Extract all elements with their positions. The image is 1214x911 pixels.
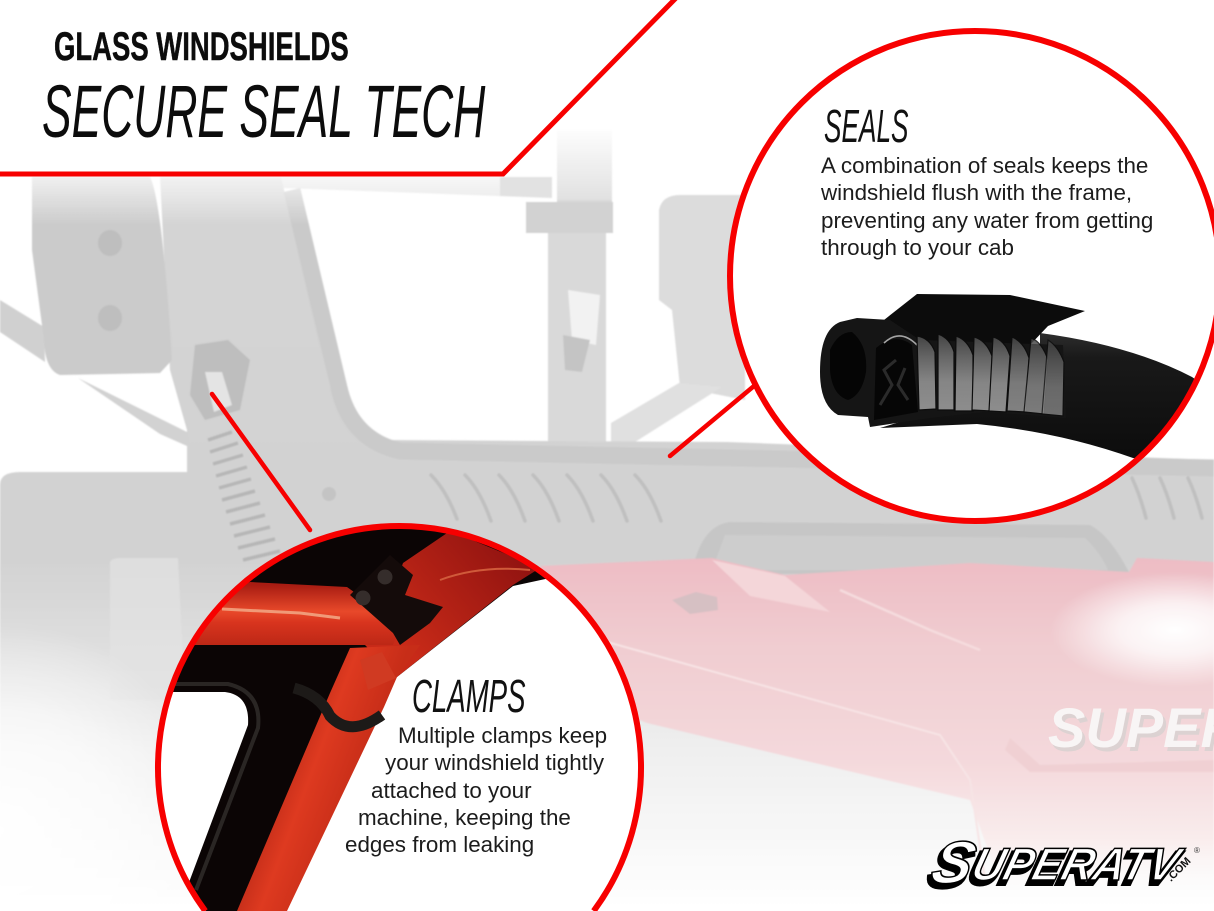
vents bbox=[431, 475, 1202, 521]
vertical red post bbox=[237, 646, 398, 911]
panel: title banner bbox=[0, 0, 676, 174]
logo: SuperATV: S bbox=[922, 833, 980, 900]
speaker holes bbox=[98, 230, 122, 256]
logo suffix: .COM: .COM bbox=[1165, 855, 1193, 884]
text block: seals bbox=[821, 100, 1153, 260]
icon: rubber seal photo bbox=[820, 294, 1194, 458]
heading: clamps: CLAMPS bbox=[412, 670, 526, 722]
body: clamps description: edges from leaking bbox=[345, 832, 534, 857]
door rim bbox=[292, 190, 1214, 468]
window opening bbox=[160, 692, 248, 881]
pointer line to seals bbox=[670, 386, 754, 456]
body: seals description: preventing any water from getting bbox=[821, 208, 1153, 233]
body: seals description bbox=[821, 153, 1153, 260]
body: clamps description: your windshield tightly bbox=[385, 750, 604, 775]
heading: secure seal tech: SECURE SEAL TECH bbox=[42, 70, 485, 153]
top frame bbox=[281, 177, 552, 198]
logo: SuperATV: S bbox=[925, 829, 983, 896]
red hood bbox=[540, 558, 1214, 911]
body: seals description: through to your cab bbox=[821, 235, 1014, 260]
heading: seals: SEALS bbox=[824, 100, 909, 152]
right side panel bbox=[659, 195, 745, 400]
pillar clamp bbox=[190, 340, 250, 420]
cable tie bbox=[294, 688, 382, 727]
black roof and door bbox=[173, 529, 546, 911]
left tub detail bbox=[110, 558, 185, 700]
lower struts bbox=[0, 300, 45, 362]
mirror box bbox=[32, 177, 172, 375]
rear bracket and strut bbox=[526, 130, 613, 442]
body: clamps description: attached to your bbox=[371, 778, 532, 803]
hood recess bbox=[695, 522, 1130, 574]
logo: SuperATV: UPERATV bbox=[967, 839, 1189, 890]
hood stripe bbox=[1005, 738, 1214, 772]
horizontal red tube bbox=[194, 582, 394, 645]
flap bbox=[884, 294, 1085, 345]
upper red tube bbox=[360, 531, 540, 677]
clamp block bbox=[350, 555, 443, 645]
icon: red frame and clamp photo bbox=[173, 529, 546, 911]
logo: SuperATV bbox=[922, 829, 1191, 900]
panel: seals circle bbox=[730, 31, 1214, 521]
metal fins bbox=[917, 334, 1064, 416]
logo mark: registered: ® bbox=[1194, 846, 1200, 855]
spring bbox=[208, 432, 280, 560]
panel: clamps circle bbox=[150, 520, 641, 911]
long seal body bbox=[880, 333, 1194, 458]
heading: glass windshields: GLASS WINDSHIELDS bbox=[54, 25, 349, 69]
logo: SuperATV: UPERATV bbox=[964, 843, 1186, 894]
body: seals description: windshield flush with the frame, bbox=[821, 180, 1132, 205]
body: clamps description: machine, keeping the bbox=[358, 805, 571, 830]
text block: clamps bbox=[345, 670, 607, 857]
pointer line to clamps bbox=[212, 394, 310, 530]
body: clamps description: Multiple clamps keep bbox=[398, 723, 607, 748]
body: clamps description bbox=[345, 723, 607, 857]
body: seals description: A combination of seals keeps the bbox=[821, 153, 1148, 178]
seal end bbox=[820, 318, 1066, 427]
